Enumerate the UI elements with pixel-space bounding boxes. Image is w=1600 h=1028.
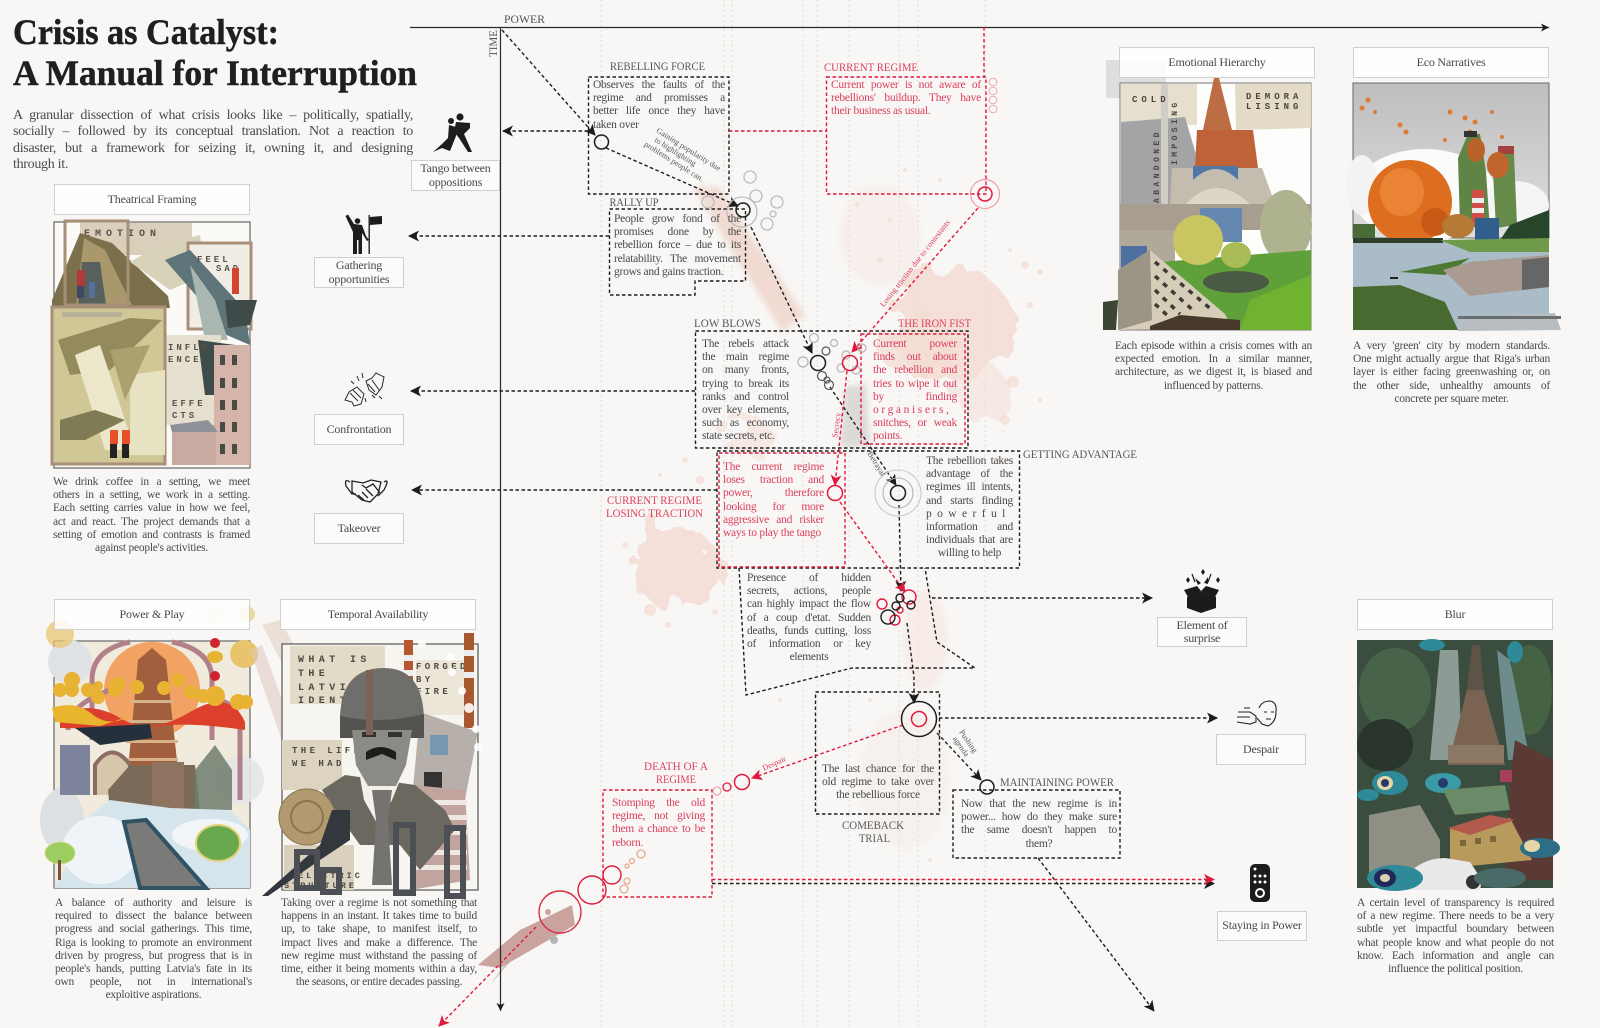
caption: eco narratives: One might actually argue that Riga's urban	[1353, 353, 1550, 365]
collage: theatrical framing: EFFE	[172, 399, 206, 409]
collage: blur	[1357, 639, 1560, 891]
arrow: black to staying in power	[712, 882, 1214, 884]
text: losing traction: loses traction and	[723, 474, 824, 486]
arrow: to element of surprise	[932, 597, 1152, 599]
icon: clashing fists	[344, 372, 384, 407]
text: rally up: People grow fond of the	[614, 213, 741, 225]
text: getting advantage: The rebellion takes	[926, 455, 1013, 467]
arrow: comeback to death of a regime	[752, 725, 903, 778]
label: staying in power	[1217, 911, 1307, 941]
caption: temporal availability: Taking over a regime is not something that	[281, 897, 477, 909]
text: the iron fist: tries to wipe it out	[873, 378, 957, 390]
heading: comeback trial	[842, 818, 904, 845]
caption: power and play: required to dissect the balance between	[55, 910, 252, 922]
label: tango between oppositions: oppositions	[429, 174, 482, 188]
collage: temporal availability: LATVIAN	[298, 683, 371, 694]
caption: emotional hierarchy	[1115, 340, 1312, 392]
arrow: iron fist to losing traction	[835, 371, 847, 485]
collage: emotional hierarchy: ABANDONED	[1153, 129, 1162, 203]
text: losing traction: The current regime	[723, 461, 824, 473]
arrow: regime death off page	[439, 927, 536, 1026]
arrow: current regime to iron fist	[852, 208, 978, 352]
collage: emotional hierarchy: IMPOSING	[1171, 99, 1180, 165]
collage: theatrical framing: EMOTION	[84, 229, 161, 240]
text: maintaining power: them?	[1026, 838, 1052, 850]
text: death of a regime: reborn.	[612, 837, 643, 849]
node: losing traction	[828, 486, 842, 500]
text: current regime: Current power is not aware of	[831, 79, 981, 91]
text: rally up: grows and gains traction.	[614, 266, 723, 278]
arrow: to takeover	[412, 489, 717, 491]
arrow: to tango between oppositions	[503, 130, 588, 132]
collage: temporal availability: THE	[298, 669, 329, 680]
caption: power and play: progress and social gatherings. This time,	[55, 923, 252, 935]
icon: remote control	[1250, 864, 1270, 902]
text: the iron fist: by finding	[873, 391, 957, 403]
caption: theatrical framing	[53, 476, 250, 554]
caption: power and play: exploitive aspirations.	[106, 989, 201, 1001]
label: takeover	[314, 513, 404, 544]
label: despair	[1216, 734, 1306, 765]
text: low blows: ranks and control	[702, 391, 789, 403]
collage: theatrical framing: FEEL	[197, 255, 231, 265]
text: hidden secrets: of a coup d'etat. Sudden	[747, 612, 871, 624]
label: staying in power: Staying in Power	[1222, 918, 1302, 932]
node chain: death of a regime	[539, 774, 750, 933]
red dashed boxes	[603, 27, 986, 897]
title: A Manual for Interruption	[13, 53, 417, 93]
header: power and play	[54, 599, 250, 630]
text: getting advantage: regimes ill intents,	[926, 481, 1013, 493]
intro text	[13, 108, 413, 172]
collage: temporal availability: WE HAD	[292, 759, 345, 769]
label: despair: Despair	[1243, 742, 1279, 756]
caption: theatrical framing: against people's activities.	[95, 542, 208, 554]
caption: emotional hierarchy: influenced by patterns.	[1164, 380, 1263, 392]
header: emotional hierarchy	[1119, 47, 1315, 78]
text: rally up: promises done by the	[614, 226, 741, 238]
caption: emotional hierarchy: expected emotion. In a similar manner,	[1115, 353, 1312, 365]
axis label: power: POWER	[504, 12, 545, 26]
text: hidden secrets	[747, 572, 871, 664]
vertical time axis	[500, 27, 502, 1011]
text: rebelling force: Observes the faults of the	[593, 79, 725, 91]
text: death of a regime: them a chance to be	[612, 823, 705, 835]
collage: temporal availability: THE LIFE	[292, 746, 362, 756]
collage: power and play	[40, 606, 264, 890]
caption: emotional hierarchy: Each episode within a crisis comes with an	[1115, 340, 1312, 352]
collage: theatrical framing: SAD	[216, 264, 241, 274]
text: the iron fist: organisers,	[873, 404, 952, 416]
text: maintaining power: the same doesn't happen to	[961, 824, 1117, 836]
collage: temporal availability	[250, 620, 482, 899]
text: rally up	[614, 213, 742, 278]
collage: emotional hierarchy: DEMORA	[1246, 92, 1302, 102]
collage: temporal availability: STRUCTURE	[284, 881, 357, 891]
caption: power and play: own people, not in international's	[55, 976, 252, 988]
caption: power and play: Riga is looking to promote an environment	[55, 937, 252, 949]
text: the iron fist: points.	[873, 430, 902, 442]
text: the iron fist	[873, 338, 958, 442]
node: comeback trial	[902, 702, 936, 736]
caption: blur: influence the political position.	[1388, 963, 1523, 975]
caption: temporal availability: time, either it being moments within a day,	[281, 963, 477, 975]
text: low blows: the main regime	[702, 351, 789, 363]
text: losing traction: looking for more	[723, 501, 824, 513]
caption: power and play: people's hands, putting Latvia's fate in its	[55, 963, 252, 975]
collage: temporal availability: FIRE	[416, 687, 451, 697]
text: low blows: trying to break its	[702, 378, 789, 390]
text: death of a regime	[612, 797, 705, 850]
label: gathering opportunities	[314, 257, 404, 288]
heading: rebelling force: REBELLING FORCE	[610, 59, 705, 73]
heading: current regime losing traction: CURRENT REGIME	[607, 493, 702, 507]
arrow: maintaining power onward	[1038, 858, 1154, 1011]
text: losing traction: ways to play the tango	[723, 527, 821, 539]
icon: handshake	[344, 479, 388, 503]
text: getting advantage: and starts finding	[926, 495, 1013, 507]
heading: low blows: LOW BLOWS	[694, 316, 761, 330]
text: losing traction: aggressive and risker	[723, 514, 824, 526]
intro text: A granular dissection of what crisis looks like – politically, spatially,	[13, 108, 413, 123]
caption: blur: know. Each information and angle can	[1357, 950, 1554, 962]
text: current regime: rebellions' buildup. They have	[831, 92, 981, 104]
node: rebelling force	[594, 135, 608, 149]
caption: eco narratives: layer is either facing greenwashing or, on	[1353, 366, 1550, 378]
heading: death of a regime	[644, 759, 708, 786]
label: tango between oppositions: Tango between	[420, 161, 491, 175]
header: eco narratives: Eco Narratives	[1417, 55, 1485, 69]
black dashed boxes	[588, 77, 1120, 858]
text: getting advantage: willing to help	[938, 547, 1001, 559]
node: rally up	[702, 171, 783, 230]
heading: the iron fist: THE IRON FIST	[898, 316, 972, 330]
heading: current regime losing traction	[606, 493, 703, 520]
text: maintaining power	[961, 798, 1117, 851]
collage: theatrical framing: ENCE	[168, 355, 202, 365]
heading: death of a regime: REGIME	[656, 772, 696, 786]
heading: current regime losing traction: LOSING TRACTION	[606, 506, 703, 520]
text: rebelling force: better life once they have	[593, 105, 725, 117]
caption: blur: what people know and what people do not	[1357, 937, 1554, 949]
panel: emotional hierarchy	[1103, 47, 1315, 392]
collage: emotional hierarchy: LISING	[1246, 102, 1302, 112]
collage: eco narratives	[1352, 82, 1561, 331]
node: current regime target	[970, 78, 1000, 208]
arrow: red to staying in power	[712, 878, 1214, 880]
arrow: rally up to low blows	[751, 227, 812, 353]
text: losing traction: power, therefore	[723, 487, 824, 499]
collage: temporal availability: BY	[416, 675, 434, 685]
text: hidden secrets: Presence of hidden	[747, 572, 871, 584]
label: element of surprise: surprise	[1184, 631, 1220, 645]
text: getting advantage: advantage of the	[926, 468, 1013, 480]
panel: theatrical framing	[50, 184, 257, 554]
text: death of a regime: regime, not giving	[612, 810, 705, 822]
caption: temporal availability: the seasons, or entire decades passing.	[296, 976, 462, 988]
label: confrontation	[314, 414, 404, 445]
label: confrontation: Confrontation	[327, 422, 391, 436]
collage: theatrical framing: CTS	[172, 411, 197, 421]
card: tango between oppositions	[411, 113, 500, 191]
text: low blows: state secrets, etc.	[702, 430, 775, 442]
axis label: time: TIME	[486, 30, 500, 57]
caption: temporal availability: new regime must withstand the passing of	[281, 950, 477, 962]
collage: theatrical framing	[50, 220, 257, 469]
heading: comeback trial: COMEBACK	[842, 818, 904, 832]
annotation: secrecy: Secrecy	[830, 412, 843, 438]
collage: emotional hierarchy: COLD	[1132, 95, 1170, 105]
heading: maintaining power: MAINTAINING POWER	[1000, 775, 1114, 789]
caption: temporal availability: impact lives and make a difference. The	[281, 937, 477, 949]
header: eco narratives	[1353, 47, 1549, 78]
text: rally up: rebellion force – due to its	[614, 239, 741, 251]
caption: blur	[1357, 897, 1554, 975]
node: maintaining power	[980, 780, 994, 794]
text: current regime	[831, 79, 982, 117]
text: getting advantage: information and	[926, 521, 1013, 533]
arrow: getting advantage to hidden secrets	[899, 505, 901, 591]
annotation: gaining popularity: to highlighting	[653, 135, 698, 168]
heading: rally up: RALLY UP	[610, 195, 659, 209]
text: hidden secrets: can highly impact the flow	[747, 598, 871, 610]
annotation: gaining popularity: problems people can.	[643, 140, 705, 183]
text: maintaining power: power... how do they make sure	[961, 811, 1117, 823]
icon: punched face	[1236, 700, 1277, 727]
text: comeback trial: old regime to take over	[822, 776, 934, 788]
caption: blur: A certain level of transparency is required	[1357, 897, 1554, 909]
caption: eco narratives: concrete per square meter.	[1394, 393, 1509, 405]
card: gathering opportunities	[314, 214, 404, 288]
text: rally up: relatability. The movement	[614, 253, 741, 265]
caption: power and play: driven by progress, but progress that is in	[55, 950, 252, 962]
caption: theatrical framing: Each setting carries value in how we feel,	[53, 502, 250, 514]
text: rebelling force: regime and promisses a	[593, 92, 725, 104]
arrow: time start to rebelling force	[502, 30, 595, 135]
caption: eco narratives: A very 'green' city by modern standards.	[1353, 340, 1550, 352]
panel: eco narratives	[1352, 47, 1561, 405]
caption: temporal availability	[281, 897, 478, 988]
panel: temporal availability	[250, 599, 482, 988]
text: hidden secrets: secrets, actions, people	[747, 585, 871, 597]
caption: power and play	[55, 897, 252, 1001]
panel: blur	[1357, 599, 1560, 975]
text: the iron fist: snitches, or weak	[873, 417, 957, 429]
text: hidden secrets: deaths, funds cutting, loss	[747, 625, 871, 637]
text: low blows: The rebels attack	[702, 338, 789, 350]
card: element of surprise	[1157, 569, 1247, 647]
annotation: despair: Despair	[761, 754, 788, 773]
annotation: pushing agenda: Pushing	[957, 728, 979, 754]
panel: power and play	[40, 599, 264, 1001]
header: blur: Blur	[1445, 607, 1465, 621]
caption: emotional hierarchy: architecture, as we digest it, is biased and	[1115, 366, 1312, 378]
text: comeback trial: The last chance for the	[822, 763, 934, 775]
text: losing traction	[723, 461, 824, 539]
caption: power and play: A balance of authority and leisure is	[55, 897, 252, 909]
annotation: betrayal: Betrayal	[865, 450, 888, 478]
horizontal power axis	[410, 26, 1549, 28]
icon: surprise box	[1184, 569, 1220, 613]
header: blur	[1357, 599, 1553, 630]
text: current regime: their business as usual.	[831, 105, 930, 117]
collage: theatrical framing: INFLU	[168, 343, 210, 353]
icon: figure with flag	[346, 214, 382, 254]
label: gathering opportunities: opportunities	[329, 272, 389, 286]
text: rebelling force: taken over	[593, 119, 639, 131]
node cluster: hidden secrets	[877, 590, 916, 625]
text: getting advantage	[926, 455, 1013, 561]
collage: temporal availability: IDENTITY?	[298, 696, 392, 707]
header: theatrical framing: Theatrical Framing	[108, 192, 196, 206]
label: element of surprise: Element of	[1176, 618, 1227, 632]
card: staying in power	[1217, 864, 1307, 941]
caption: blur: of a new regime. There needs to be a very	[1357, 910, 1554, 922]
arrow: low blows to getting advantage	[830, 387, 896, 485]
text: comeback trial	[822, 763, 934, 803]
header: temporal availability: Temporal Availability	[328, 607, 428, 621]
text: the iron fist: the rebellion and	[873, 364, 957, 376]
caption: theatrical framing: act and react. The project demands that a	[53, 516, 250, 528]
intro text: socially – followed by its conceptual translation. Not a reaction to	[13, 124, 413, 139]
annotation: gaining popularity	[643, 124, 723, 188]
text: low blows	[702, 338, 790, 442]
arrow: to despair	[939, 717, 1217, 719]
text: comeback trial: the rebellious force	[836, 789, 920, 801]
header: emotional hierarchy: Emotional Hierarchy	[1168, 55, 1266, 69]
icon: tango dancers	[433, 113, 472, 152]
caption: blur: subtle yet impactful boundary between	[1357, 923, 1554, 935]
heading: current regime: CURRENT REGIME	[824, 60, 918, 74]
annotation: pushing agenda: agenda	[951, 735, 971, 759]
text: the iron fist: finds out about	[873, 351, 957, 363]
arrow: to gathering opportunities	[409, 235, 609, 237]
card: takeover	[314, 479, 404, 544]
arrow: rebelling force to rally up	[606, 148, 738, 206]
heading: getting advantage: GETTING ADVANTAGE	[1023, 447, 1137, 461]
caption: temporal availability: happens in an instant. It takes time to build	[281, 910, 477, 922]
caption: temporal availability: up, to take shape, to manifest itself, to	[281, 923, 477, 935]
caption: theatrical framing: We drink coffee in a setting, we meet	[53, 476, 250, 488]
card: despair	[1216, 700, 1306, 765]
text: maintaining power: Now that the new regime is in	[961, 798, 1117, 810]
collage: temporal availability: ELECTRIC	[298, 871, 363, 881]
heading: comeback trial: TRIAL	[859, 831, 890, 845]
text: getting advantage: individuals that are	[926, 534, 1013, 546]
arrow: comeback to maintaining power	[937, 733, 981, 780]
label: tango between oppositions	[411, 160, 500, 191]
header: temporal availability	[280, 599, 476, 630]
text: death of a regime: Stomping the old	[612, 797, 705, 809]
text: getting advantage: powerful	[926, 508, 1011, 520]
text: hidden secrets: of information or key	[747, 638, 871, 650]
header: theatrical framing	[54, 184, 250, 215]
text: hidden secrets: elements	[790, 651, 828, 663]
arrow: losing traction to hidden secrets	[840, 502, 905, 592]
title	[13, 12, 417, 93]
collage: temporal availability: WHAT IS	[298, 655, 371, 666]
text: the iron fist: Current power	[873, 338, 957, 350]
arrow: hidden secrets to comeback trial	[907, 623, 914, 703]
label: element of surprise	[1157, 617, 1247, 647]
annotation: losing traction: Losing traction due to contestants	[878, 218, 952, 309]
arrow: to confrontation	[411, 390, 695, 392]
collage: temporal availability: FORGED	[416, 662, 469, 672]
label: takeover: Takeover	[338, 521, 380, 535]
label: gathering opportunities: Gathering	[336, 258, 382, 272]
intro text: through it.	[13, 157, 68, 172]
node cluster: low blows and iron fist	[798, 334, 866, 390]
title: Crisis as Catalyst:	[13, 12, 279, 52]
header: power and play: Power & Play	[120, 607, 184, 621]
caption: eco narratives: the other side, unhealthy amounts of	[1353, 380, 1550, 392]
node: getting advantage target	[875, 470, 921, 516]
collage: emotional hierarchy	[1103, 60, 1312, 330]
text: low blows: such as economy,	[702, 417, 789, 429]
annotation: gaining popularity: Gaining popularity due	[655, 126, 723, 173]
intro text: disaster, but a framework for seizing it, owning it, and designing	[13, 141, 413, 156]
caption: theatrical framing: others in a setting, we work in a setting.	[53, 489, 250, 501]
text: low blows: on many fronts,	[702, 364, 789, 376]
caption: theatrical framing: setting of emotion and contrasts is framed	[53, 529, 250, 541]
heading: death of a regime: DEATH OF A	[644, 759, 708, 773]
text: rebelling force	[593, 79, 726, 131]
annotation: pushing agenda	[950, 728, 979, 760]
text: low blows: over key elements,	[702, 404, 789, 416]
card: confrontation	[314, 372, 404, 445]
caption: eco narratives	[1353, 340, 1550, 405]
